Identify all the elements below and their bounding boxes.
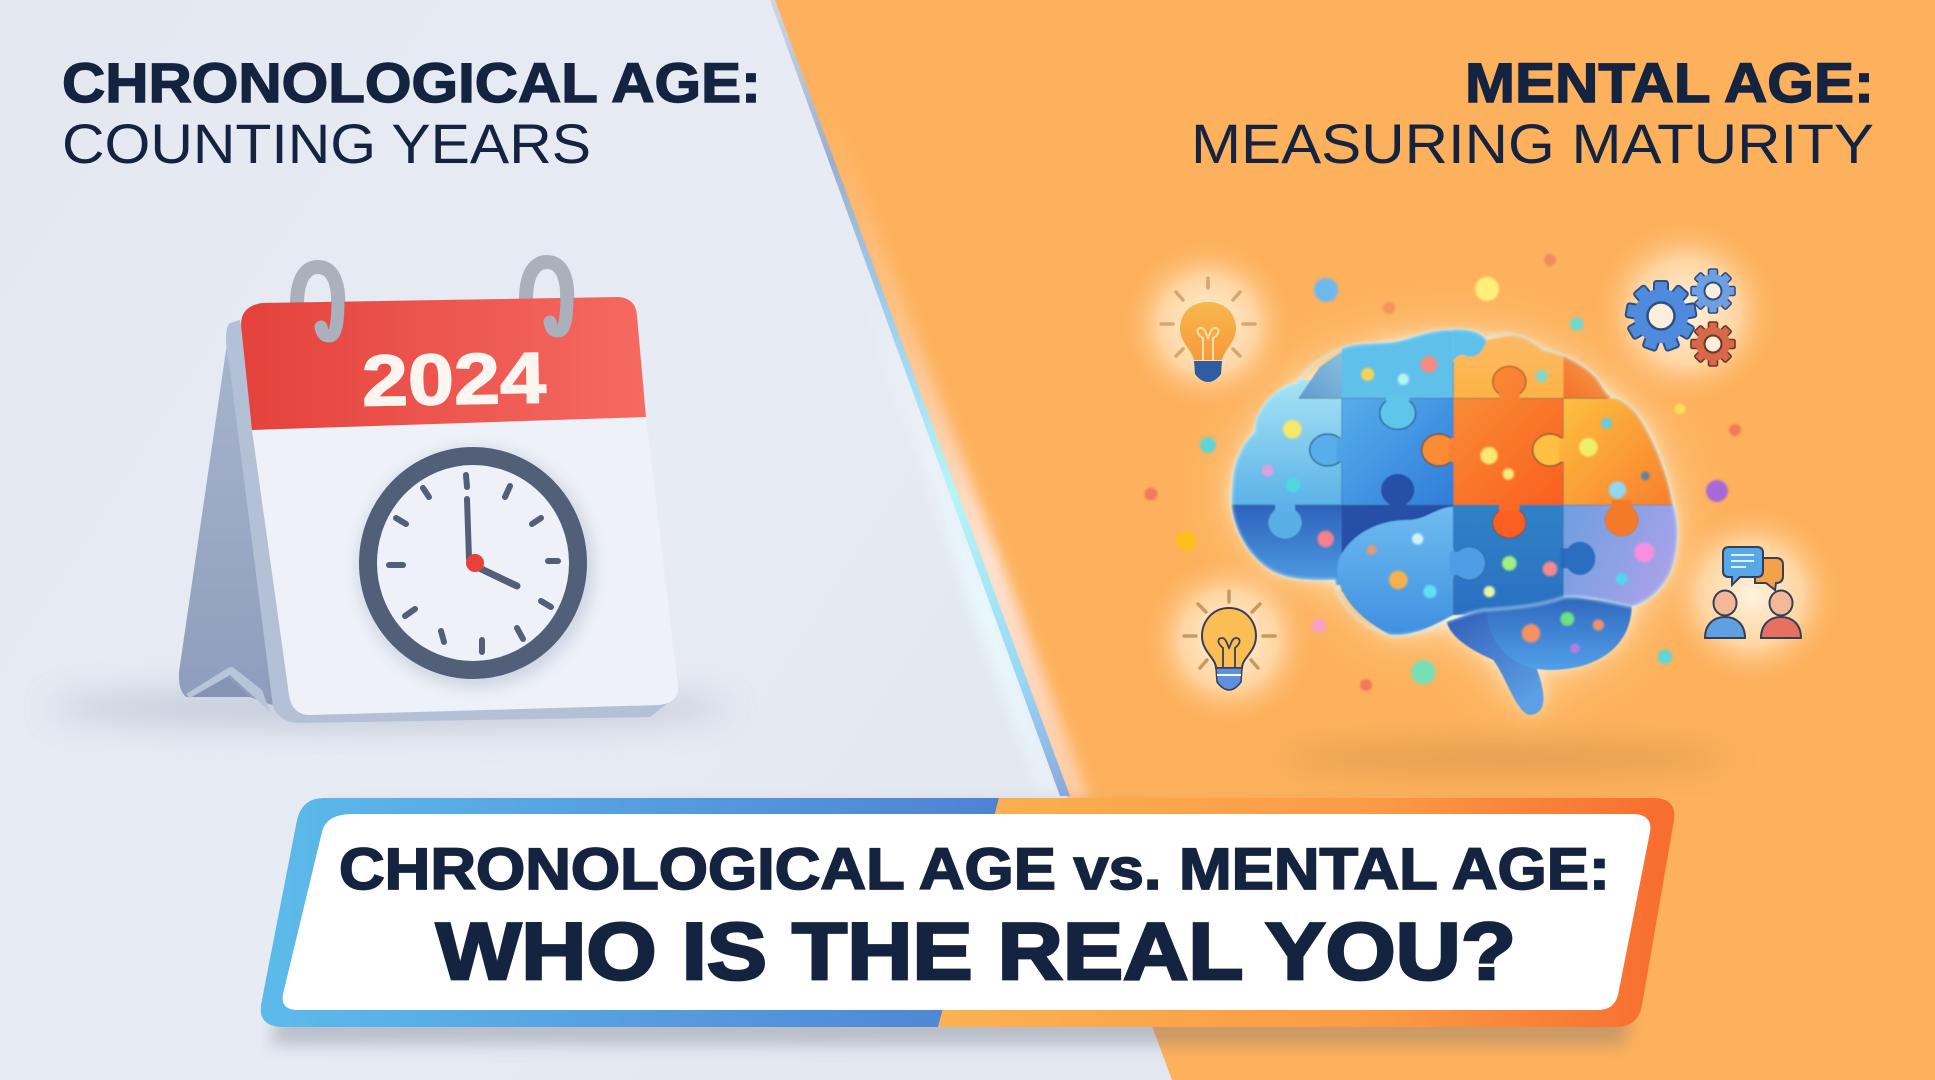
brain stem — [1447, 607, 1543, 715]
puzzle pieces — [1230, 327, 1683, 635]
heading: chronological age — [62, 51, 761, 175]
heading: mental age: MENTAL AGE: — [1465, 51, 1874, 114]
banner question: WHO IS THE REAL YOU? — [436, 907, 1516, 997]
title banner — [261, 798, 1674, 1045]
sparkle dots — [1262, 317, 1685, 691]
gear small red — [1691, 322, 1735, 366]
heading: chronological age: COUNTING YEARS — [62, 112, 591, 175]
brain rim light — [1232, 329, 1677, 635]
brain shadow — [1280, 745, 1730, 771]
icon: gears — [1591, 217, 1781, 407]
gear small blue — [1691, 269, 1735, 313]
banner headline: CHRONOLOGICAL AGE vs. MENTAL AGE: — [339, 837, 1610, 902]
cerebellum — [1487, 595, 1632, 670]
icon: desk calendar with clock — [50, 262, 730, 728]
icon: light bulb bottom — [1141, 552, 1317, 728]
icon: light bulb top — [1120, 237, 1296, 413]
floating dots — [1144, 254, 1741, 551]
tabs — [1380, 397, 1416, 429]
icon: puzzle brain — [1230, 317, 1685, 715]
icon: people talking — [1660, 503, 1844, 687]
clock — [358, 448, 594, 688]
year label: 2024 — [361, 338, 547, 422]
gear large — [1625, 281, 1697, 351]
heading: mental age — [1191, 51, 1874, 175]
heading: mental age: MEASURING MATURITY — [1191, 112, 1874, 175]
heading: chronological age: CHRONOLOGICAL AGE: — [62, 51, 761, 114]
